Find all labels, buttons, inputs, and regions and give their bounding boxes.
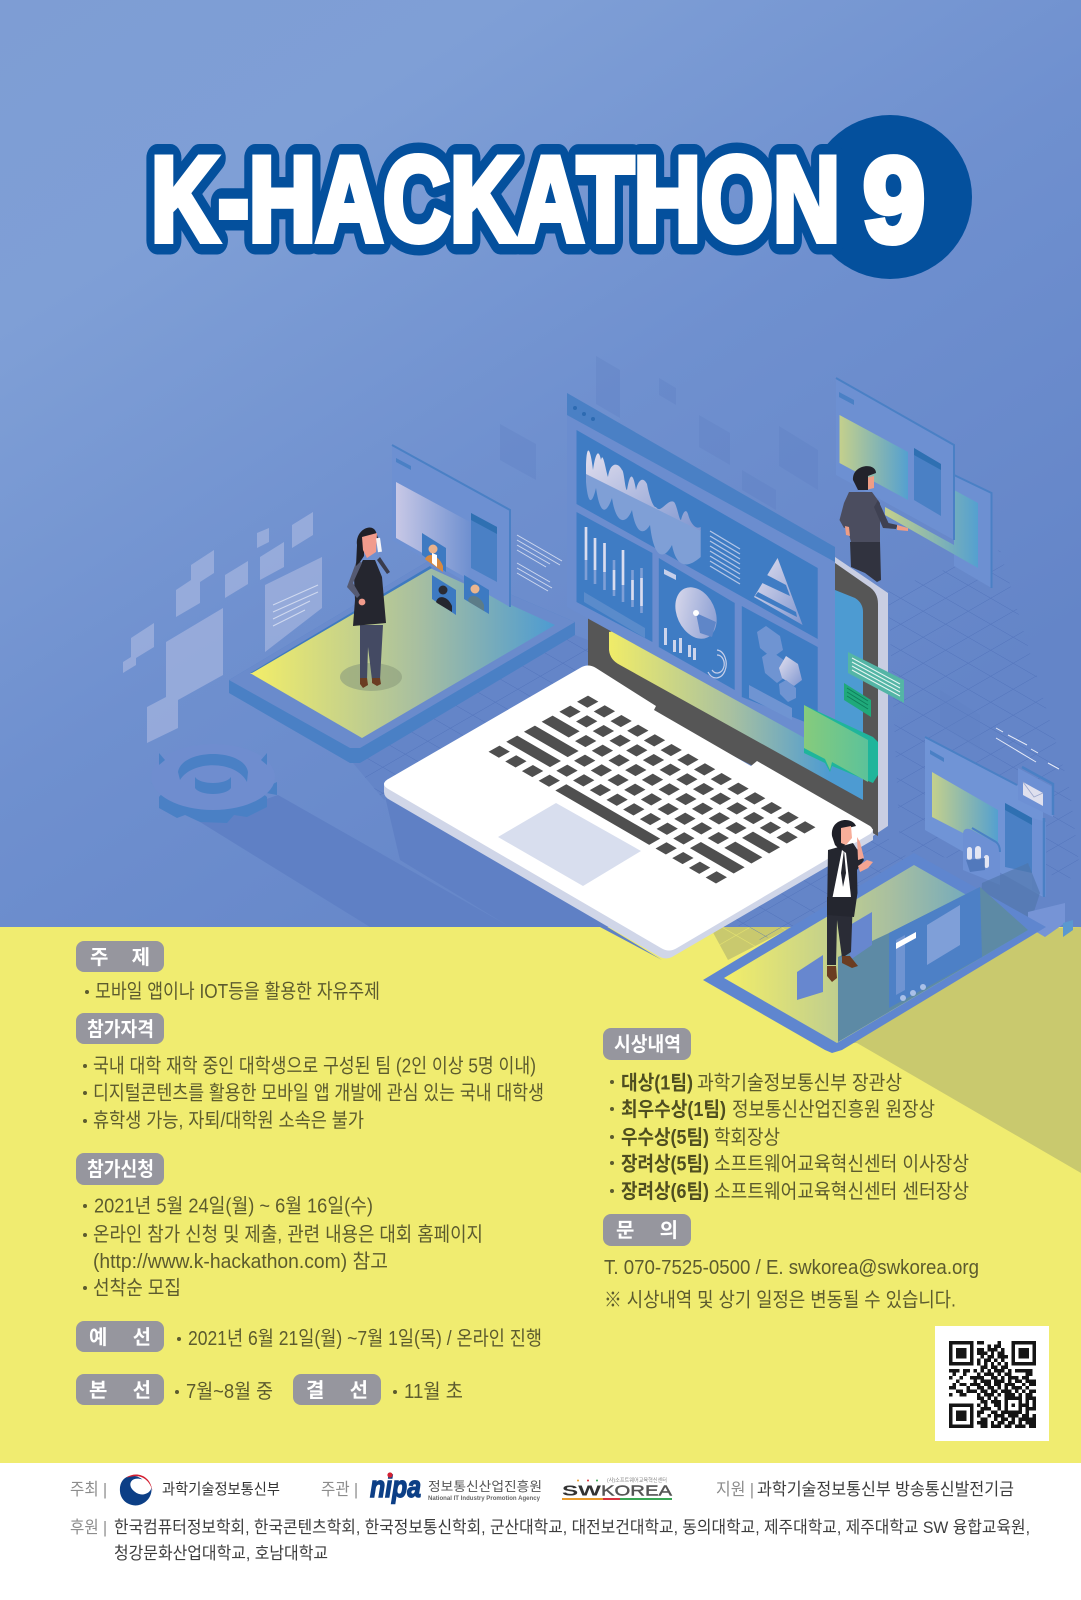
footer: support: 지원 |: [716, 1480, 754, 1499]
window behind woman: [392, 445, 510, 607]
slider chart panel: [576, 512, 652, 642]
section: awards: 정보통신산업진흥원 원장상: [732, 1098, 935, 1121]
section: awards: 장려상(6팀): [621, 1180, 709, 1203]
dashboard panel: [567, 393, 835, 748]
logo: SW KOREA: (사)소프트웨어교육혁신센터: [607, 1476, 667, 1484]
bottom-right platform: [703, 853, 1046, 1053]
logo: SW KOREA: [562, 1476, 672, 1500]
logo: SW KOREA: SW: [562, 1482, 602, 1500]
section: final round: 결 선: [306, 1379, 368, 1402]
title: K-HACKATHON: K-HACKATHON: [151, 132, 840, 266]
footer: sponsors: [70, 1518, 1030, 1563]
section: main round: 7월~8월 중: [186, 1380, 273, 1403]
floor shadows: [200, 792, 662, 960]
section: main round: [76, 1374, 273, 1405]
background: olive laptop shadow: [710, 927, 792, 960]
logo: nipa: nipa: [370, 1469, 421, 1504]
logo: SW KOREA: KOREA: [601, 1482, 672, 1500]
bottom-right window cluster: [925, 728, 1073, 937]
section: preliminary: 예 선: [89, 1326, 151, 1349]
section: application: 2021년 5월 24일(월) ~ 6월 16일(수): [94, 1194, 373, 1218]
section: awards: 학회장상: [714, 1126, 780, 1149]
section: awards: 대상(1팀): [621, 1072, 693, 1094]
laptop screen: [588, 557, 888, 836]
section: contact: ※ 시상내역 및 상기 일정은 변동될 수 있습니다.: [604, 1288, 956, 1312]
section: theme: 모바일 앱이나 IOT등을 활용한 자유주제: [95, 980, 380, 1003]
footer: support: 과학기술정보통신부 방송통신발전기금: [757, 1480, 1014, 1499]
faint background squares: [500, 356, 980, 750]
floor grid lines: [353, 550, 1081, 940]
section: awards: 장려상(5팀): [621, 1152, 709, 1176]
logo: nipa: 정보통신산업진흥원: [428, 1479, 542, 1494]
keyboard: [494, 699, 810, 880]
chat bubble: green large: [804, 705, 878, 783]
section: application: 참가신청: [87, 1158, 154, 1181]
section: eligibility: [76, 1013, 544, 1132]
section: eligibility: 국내 대학 재학 중인 대학생으로 구성된 팀 (2인 이상 5명 이내): [93, 1054, 536, 1078]
section: awards: [603, 1028, 969, 1203]
footer: organizers: 주관 |: [321, 1480, 358, 1499]
left platform: [229, 560, 575, 763]
section: awards: 소프트웨어교육혁신센터 이사장상: [714, 1152, 969, 1176]
wave and pyramid chart panel: [576, 430, 818, 639]
section: awards: 우수상(5팀): [621, 1126, 709, 1149]
section: contact: 문 의: [616, 1219, 678, 1242]
hexagon panel: [742, 606, 818, 727]
section: theme: 주 제: [90, 946, 150, 969]
title: number 9: 9: [863, 134, 925, 268]
logo: nipa: National IT Industry Promotion Agency: [428, 1495, 540, 1502]
section: awards: 최우수상(1팀): [621, 1098, 726, 1121]
person: woman on the phone: [340, 528, 402, 691]
footer: sponsors: 청강문화산업대학교, 호남대학교: [114, 1544, 328, 1563]
section: eligibility: 휴학생 가능, 자퇴/대학원 소속은 불가: [93, 1109, 364, 1132]
code lines beside window: [517, 535, 562, 591]
section: application: 선착순 모집: [93, 1276, 181, 1300]
person: man in suit: [827, 820, 873, 982]
logo: nipa: [370, 1469, 542, 1504]
footer: host: 주최 |: [70, 1480, 107, 1499]
decorative tablet: [889, 887, 982, 1008]
section: preliminary: [76, 1321, 542, 1352]
profile cards: [422, 533, 489, 615]
code lines on floating tile: [273, 585, 318, 626]
chat bubble: teal lined note: [848, 652, 904, 703]
section: application: 온라인 참가 신청 및 제출, 관련 내용은 대회 홈페이지: [93, 1223, 483, 1246]
footer: sponsors: 후원 |: [70, 1518, 107, 1537]
section: theme: [76, 941, 380, 1003]
footer: organizers: [321, 1469, 672, 1504]
footer white strip: [0, 1463, 1081, 1600]
section: application: [76, 1153, 483, 1300]
section: awards: 시상내역: [614, 1033, 681, 1056]
QR code: [935, 1326, 1049, 1441]
title: blue circle behind 9: [808, 115, 972, 279]
gauge and bars panel: [659, 558, 735, 690]
tile with icons: [963, 828, 1000, 885]
title: K-HACKATHON: K-HACKATHON: [151, 132, 840, 266]
section: final round: [293, 1374, 463, 1405]
icon: government emblem: [120, 1474, 152, 1506]
chat bubble: small green: [844, 683, 871, 717]
icon: envelope card: [1018, 767, 1053, 817]
laptop base: [384, 666, 873, 958]
section: awards: 과학기술정보통신부 장관상: [697, 1072, 902, 1094]
footer: sponsors: 한국컴퓨터정보학회, 한국콘텐츠학회, 한국정보통신학회, 군산대학교, 대전보건대학교, 동의대학교, 제주대학교, 제주대학교 SW 융합교육원,: [114, 1518, 1030, 1537]
footer: host: [70, 1474, 280, 1506]
section: eligibility: 참가자격: [87, 1018, 154, 1041]
background: yellow lower area: [0, 927, 1081, 1464]
section: eligibility: 디지털콘텐츠를 활용한 모바일 앱 개발에 관심 있는 국내 대학생: [93, 1082, 544, 1104]
laptop trackpad: [498, 803, 641, 886]
footer: host: 과학기술정보통신부: [162, 1481, 280, 1498]
right floating windows: [836, 378, 992, 588]
background: olive platform shadow: [837, 927, 1081, 1173]
section: final round: 11월 초: [404, 1380, 463, 1403]
translucent floating tiles, left: [123, 512, 322, 743]
section: awards: 소프트웨어교육혁신센터 센터장상: [714, 1180, 969, 1203]
section: application: (http://www.k-hackathon.com) 참고: [93, 1250, 388, 1273]
background: blue gradient: [0, 0, 1081, 930]
section: contact: T. 070-7525-0500 / E. swkorea@swkorea.org: [604, 1257, 979, 1279]
icon: gear: [149, 744, 277, 823]
person: man pointing at window: [840, 466, 908, 582]
section: preliminary: 2021년 6월 21일(월) ~7월 1일(목) / 온라인 진행: [188, 1327, 542, 1350]
section: main round: 본 선: [89, 1379, 151, 1402]
section: contact: [603, 1214, 979, 1312]
